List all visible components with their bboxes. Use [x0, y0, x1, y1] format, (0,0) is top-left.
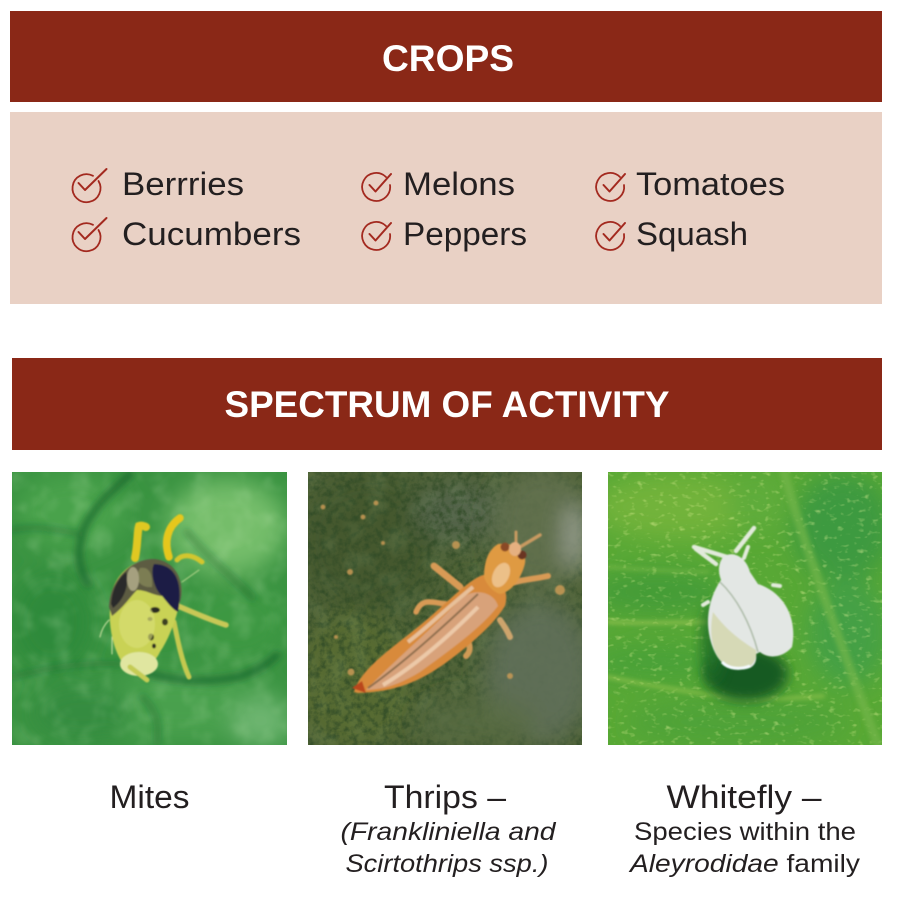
heading: crops: CROPS	[382, 38, 514, 79]
label: thrips: Scirtothrips ssp.)	[346, 850, 548, 878]
label: thrips: (Frankliniella and	[340, 818, 557, 846]
crop item: Cucumbers: Cucumbers	[122, 216, 301, 252]
header: crops	[10, 11, 882, 102]
crop item: Berrries: Berrries	[122, 166, 244, 202]
header: spectrum of activity	[12, 358, 882, 450]
photo: thrips on leaf	[308, 472, 582, 745]
whitefly	[694, 528, 793, 701]
photo: whitefly on leaf	[608, 472, 882, 745]
label: whitefly: Species within the	[634, 818, 856, 846]
crop item: Melons	[362, 166, 515, 202]
mite	[100, 518, 226, 680]
crop item: Berrries	[72, 166, 244, 202]
crop item: Melons: Melons	[403, 166, 515, 202]
label: whitefly: Aleyrodidae family	[628, 850, 861, 878]
crop item: Tomatoes: Tomatoes	[636, 166, 785, 202]
crop item: Squash: Squash	[636, 216, 748, 252]
photo: mite on leaf	[10, 472, 292, 746]
label: whitefly	[628, 779, 861, 878]
label: thrips	[340, 779, 557, 878]
label: whitefly: Whitefly –	[666, 779, 822, 815]
crop item: Peppers: Peppers	[403, 216, 527, 252]
panel: crops list	[10, 112, 882, 304]
label: mites: Mites	[110, 779, 190, 815]
label: thrips: Thrips –	[384, 779, 506, 815]
heading: spectrum of activity: SPECTRUM OF ACTIVITY	[224, 384, 670, 425]
thrips	[352, 532, 548, 693]
